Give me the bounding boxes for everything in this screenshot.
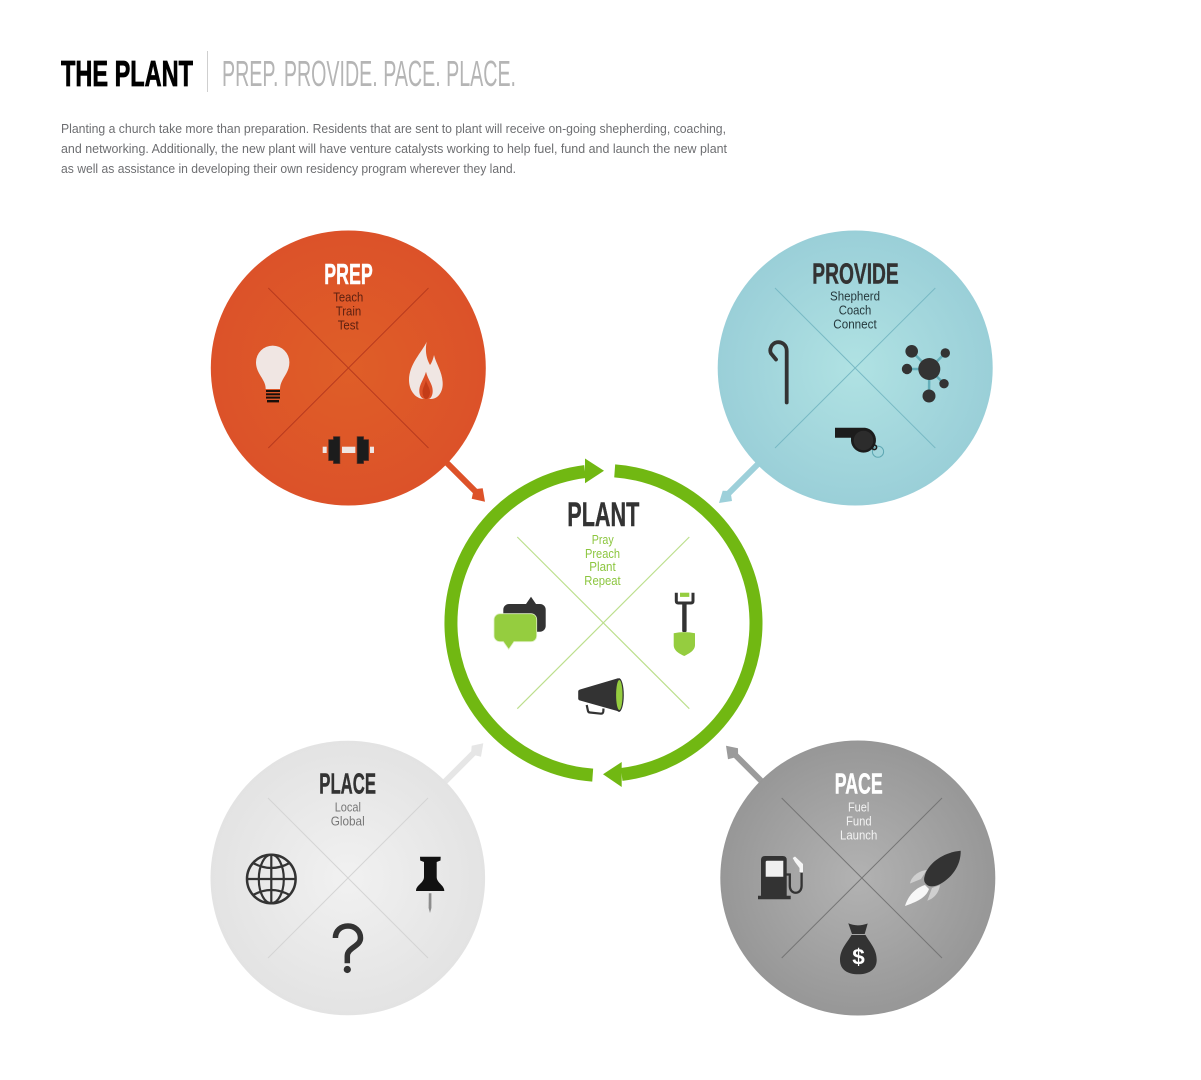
intro paragraph: as well as assistance in developing their own residency program wherever they land. (61, 161, 516, 176)
text: Pray Preach Plant Repeat: Plant (589, 560, 616, 574)
arrow: Pace to Plant (726, 746, 770, 790)
panel: Plant (451, 458, 756, 787)
text: Pray Preach Plant Repeat (584, 533, 621, 588)
text: Local Global (331, 801, 365, 829)
panel: Provide (718, 230, 993, 506)
text: Local Global: Global (331, 815, 365, 829)
text: Pray Preach Plant Repeat: Pray (592, 533, 614, 547)
icon: whistle (835, 428, 884, 457)
heading: Prep: PREP (324, 259, 373, 291)
icon: dumbbell (323, 436, 374, 464)
intro paragraph: Planting a church take more than preparation. Residents that are sent to plant will receive on-going shepherding, coaching, (61, 121, 726, 136)
intro paragraph: and networking. Additionally, the new plant will have venture catalysts working to help fuel, fund and launch the new plant (61, 141, 727, 156)
intro paragraph (61, 121, 727, 176)
title: The Plant: THE PLANT (61, 53, 193, 94)
heading: Place: PLACE (319, 768, 376, 800)
text: Shepherd Coach Connect (830, 290, 880, 332)
icon: money bag (840, 923, 877, 974)
text: Pray Preach Plant Repeat: Repeat (584, 574, 621, 588)
icon: shepherd's crook (770, 342, 787, 402)
text: Teach Train Test: Train (336, 304, 361, 318)
icon: question mark (335, 926, 360, 973)
heading: Pace: PACE (835, 768, 883, 800)
icon: flame (409, 342, 443, 399)
ring arc: right with arrowhead (603, 471, 756, 787)
heading: Provide: PROVIDE (812, 258, 899, 290)
text: Shepherd Coach Connect: Shepherd (830, 290, 880, 304)
panel: Prep (211, 230, 486, 506)
text: Teach Train Test: Test (338, 318, 359, 332)
text: Fuel Fund Launch: Fund (846, 815, 872, 829)
arrow: Provide to Plant (719, 458, 764, 503)
icon: megaphone (578, 678, 624, 714)
text: Shepherd Coach Connect: Connect (833, 318, 877, 332)
icon: shovel (674, 593, 695, 656)
text: Fuel Fund Launch (840, 801, 877, 843)
heading: Plant: PLANT (567, 496, 639, 534)
text: Fuel Fund Launch: Launch (840, 829, 877, 843)
panel: Pace (720, 740, 995, 1016)
text: Teach Train Test: Teach (333, 290, 363, 304)
icon: speech bubbles (494, 597, 546, 649)
subtitle: Prep. Provide. Pace. Place.: PREP. PROVIDE. PACE. PLACE. (222, 53, 516, 94)
icon: light bulb (256, 346, 289, 402)
icon: rocket (905, 851, 961, 906)
icon: network (902, 345, 950, 402)
text: Shepherd Coach Connect: Coach (839, 304, 871, 318)
text: Local Global: Local (335, 801, 361, 815)
text: Pray Preach Plant Repeat: Preach (585, 547, 620, 561)
arrow: Prep to Plant (442, 458, 485, 502)
icon: push pin (416, 857, 444, 913)
text: Fuel Fund Launch: Fuel (848, 801, 869, 815)
icon: globe (247, 855, 296, 903)
icon: fuel pump (758, 856, 803, 899)
arrow: Place to Plant (438, 743, 483, 789)
icon: money bag: $ (852, 944, 865, 970)
text: Teach Train Test (333, 290, 363, 332)
panel: Place (210, 741, 485, 1015)
ring arc: left with arrowhead (451, 458, 604, 775)
